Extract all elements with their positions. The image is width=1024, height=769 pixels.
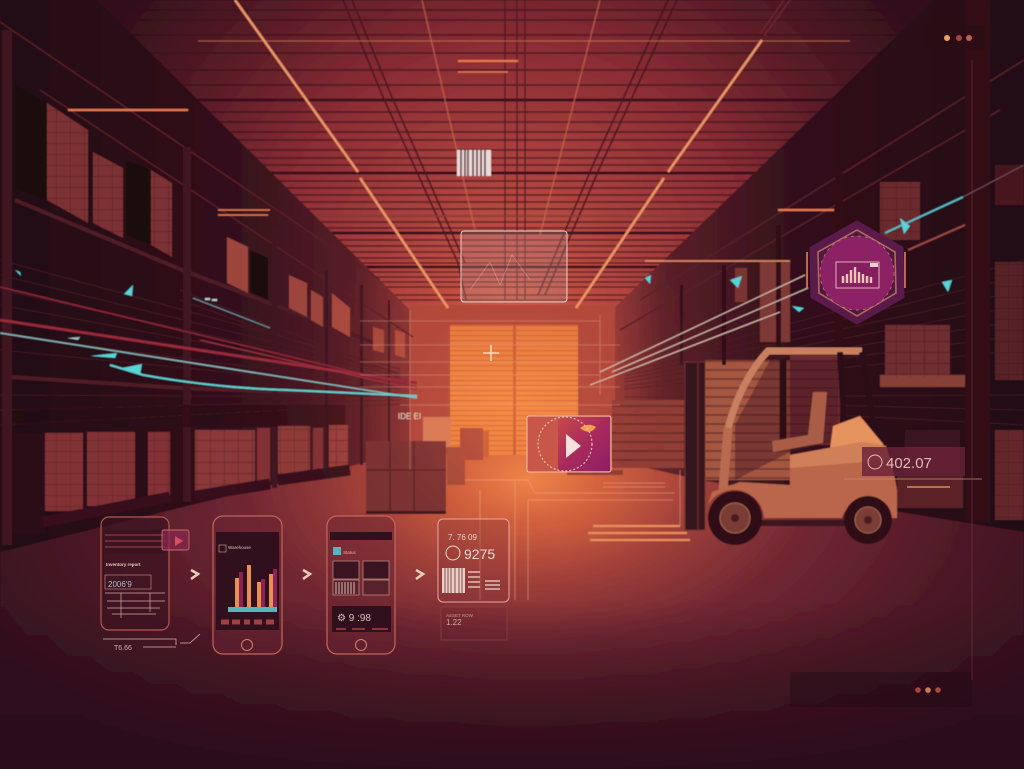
scan result card: 7. 76 09 [448,533,477,542]
seat [772,392,827,452]
lower left pallets [12,425,348,533]
glass data panel [461,231,567,302]
arrow: step one to two [191,570,198,579]
bar chart [228,565,277,612]
secondary data card: ASSET ROW [446,613,474,618]
right uprights [680,0,990,522]
phone 1: inventory screen [101,517,169,630]
floor circuit lines [465,470,680,600]
video thumbnail [162,530,189,550]
right wall [600,0,1024,560]
wall light strips [68,61,834,210]
overhead guard [728,351,862,428]
metric tag [862,447,965,476]
data streams right [590,165,1024,385]
cyan arrow markers left [15,270,217,375]
mast [685,362,705,530]
phone 1: inventory screen: Inventory report [106,562,141,567]
metric tag: 402.07 [886,455,932,472]
phone 3: scan screen: Status [343,550,357,555]
phone 1 caption: T6.66 [114,645,132,652]
phone 1 caption [103,634,200,652]
hood [830,416,884,449]
cyan arrow markers right [645,218,952,312]
scan result card [438,519,509,602]
icon: play triangle [566,434,581,458]
body [708,442,897,518]
left shelf uprights [2,30,390,545]
wheels [708,491,892,545]
upper left dark bays [15,85,268,300]
scan result card: 9275 [464,546,495,562]
left wall [0,0,430,560]
ceiling light strips [235,0,762,308]
hexagon analytics badge [807,222,905,323]
rolling door [450,325,578,455]
forklift [588,351,897,545]
right cartons [612,165,1024,520]
arrow: step three to four [416,570,423,579]
boxes near door [366,417,623,514]
secondary data card: 1.22 [446,618,462,627]
horizontal grid lines across door [360,310,620,470]
video player panel [527,416,611,472]
status pill top right [925,25,985,50]
phone 3: scan screen: ⚙ 9 :98 [337,613,371,624]
left shelf slats [0,260,400,425]
ceiling [98,0,932,310]
barcode tag [457,150,491,176]
upper left cartons [47,103,405,358]
left shelf beams [10,200,380,395]
right beams [620,60,1024,330]
bar chart mini [843,267,871,283]
status bar bottom right [790,672,972,707]
crosshair on door [483,345,499,361]
shelf label: IDE EI [398,412,421,421]
cab interior [735,360,838,480]
phone 2: bar chart screen [213,516,282,654]
phone 3: scan screen [327,516,395,654]
forks [588,526,690,540]
frame line right [971,60,973,680]
floor [0,455,1024,769]
back wall [410,305,615,460]
right shelf slats [624,260,1024,425]
lower shelf dark band [15,405,345,427]
secondary data card [441,607,507,640]
phone 1: inventory screen: 2006'9 [108,580,132,589]
arrow: step two to three [303,570,310,579]
phone 2: bar chart screen: Warehouse [228,545,251,550]
metric tag underline [844,478,982,480]
data streams left [0,287,417,398]
